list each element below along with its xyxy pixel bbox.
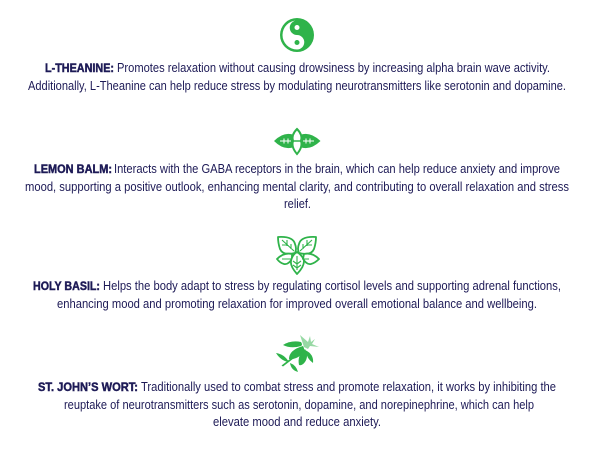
text block: L-Theanine: L-THEANINE:	[45, 61, 114, 75]
text block: L-Theanine: Promotes relaxation without causing drowsiness by increasing alpha brain wave activity.	[117, 61, 550, 75]
icon: yin yang	[280, 18, 314, 52]
text block: L-Theanine	[28, 61, 566, 93]
icon: holy basil leaves	[277, 237, 319, 274]
text block: St. John's Wort: Traditionally used to combat stress and promote relaxation, it works by inhibiting the	[141, 380, 556, 394]
text block: Lemon Balm: LEMON BALM:	[34, 162, 112, 176]
text block: Lemon Balm: Interacts with the GABA receptors in the brain, which can help reduce anxiety and improve	[114, 162, 560, 176]
text block: Holy Basil: Helps the body adapt to stress by regulating cortisol levels and supporting adrenal functions,	[103, 279, 561, 293]
text block: St. John's Wort	[38, 380, 556, 429]
text block: Lemon Balm	[25, 162, 569, 211]
text block: Holy Basil: HOLY BASIL:	[33, 279, 100, 293]
icon: St. John's Wort sprig	[276, 335, 319, 372]
text block: Holy Basil	[33, 279, 561, 311]
text block: Holy Basil: enhancing mood and promoting relaxation for improved overall emotional balance and wellbeing.	[57, 297, 537, 311]
icon: lemon balm leaves	[274, 129, 320, 154]
text block: St. John's Wort: elevate mood and reduce anxiety.	[213, 415, 381, 429]
text block: St. John's Wort: ST. JOHN’S WORT:	[38, 380, 138, 394]
text block: Lemon Balm: relief.	[284, 197, 311, 211]
text block: St. John's Wort: reuptake of neurotransmitters such as serotonin, dopamine, and norepinephrine, which can help	[64, 398, 534, 412]
